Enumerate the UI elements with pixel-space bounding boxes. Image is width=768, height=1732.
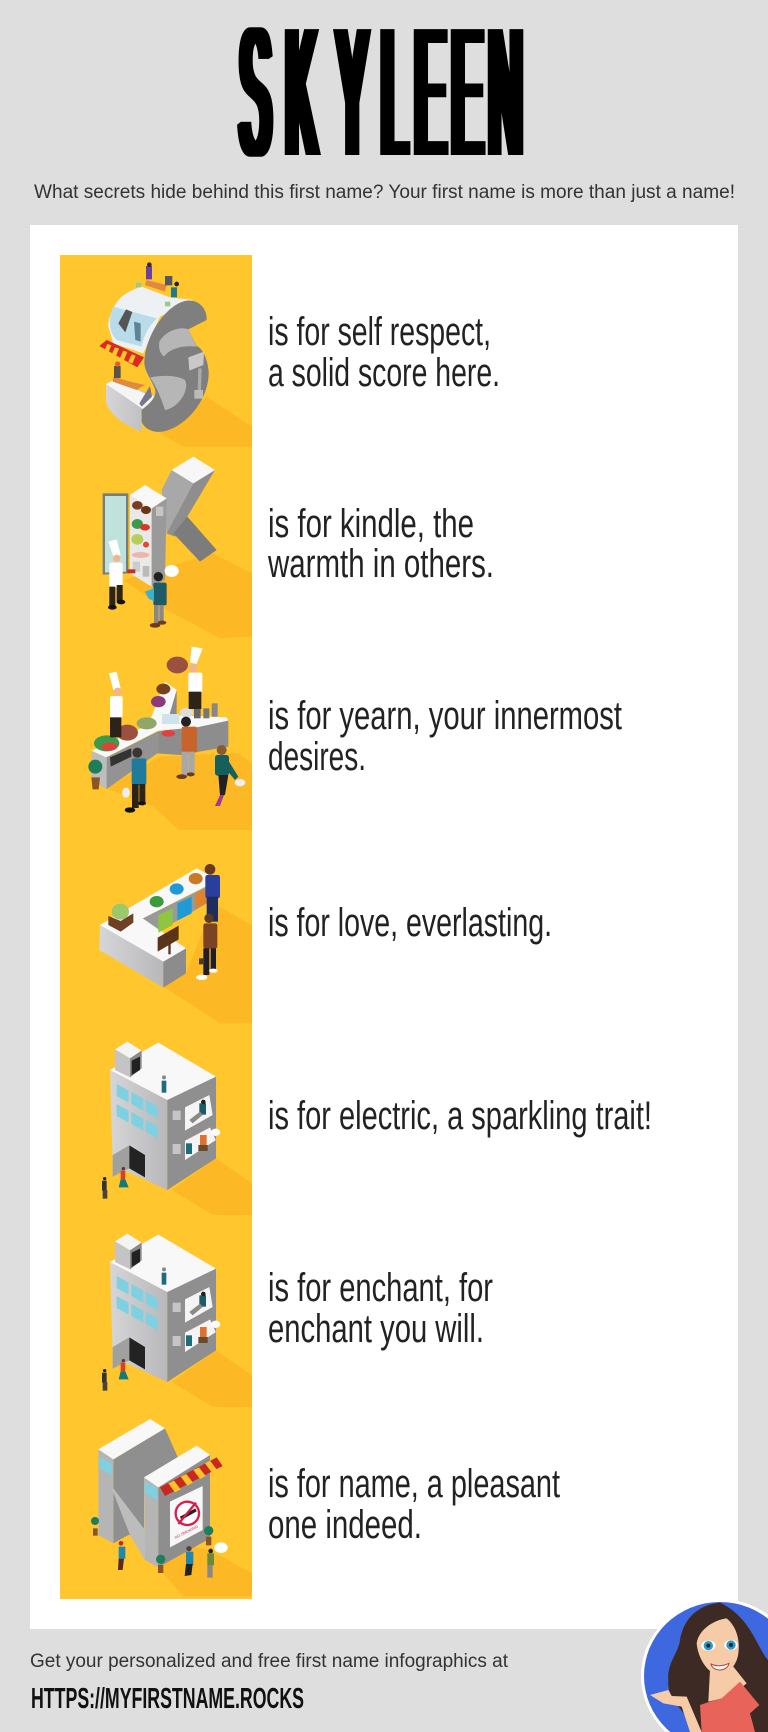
icon: letter N shop: NO SMOKING <box>174 1524 199 1540</box>
panel: white content card <box>30 225 738 1629</box>
icon: letter K fridge <box>103 457 252 638</box>
icon: letter E building one <box>102 1042 252 1215</box>
text: N row <box>268 1462 560 1547</box>
text: S row: is for self respect, <box>268 310 491 354</box>
text: N row: is for name, a pleasant <box>268 1462 560 1506</box>
icon: letter Y buffet <box>88 647 252 830</box>
icon: letter L recycling counter <box>99 864 252 1023</box>
text: K row <box>267 502 494 586</box>
text: Y row: desires. <box>268 735 366 779</box>
text: S row <box>268 310 500 395</box>
subtitle: What secrets hide behind this first name? Your first name is more than just a name! <box>34 182 735 203</box>
text: S row: a solid score here. <box>268 351 500 395</box>
icon: letter E building two <box>102 1234 252 1407</box>
text: E row two <box>268 1266 493 1351</box>
text: K row: warmth in others. <box>267 542 494 586</box>
text: Y row <box>268 694 622 779</box>
icon: letter N shop <box>91 1419 252 1597</box>
text: E row two: is for enchant, for <box>268 1266 493 1310</box>
text: N row: one indeed. <box>268 1503 422 1547</box>
icon: avatar woman <box>641 1599 768 1732</box>
text: E row two: enchant you will. <box>268 1307 484 1351</box>
panel: yellow illustration column <box>60 255 252 1599</box>
footer text: Get your personalized and free first name infographics at <box>30 1651 509 1672</box>
footer url: HTTPS://MYFIRSTNAME.ROCKS <box>31 1683 304 1715</box>
text: L row: is for love, everlasting. <box>268 901 552 945</box>
text: K row: is for kindle, the <box>268 502 474 546</box>
text: Y row: is for yearn, your innermost <box>268 694 622 738</box>
icon: letter S office <box>99 262 252 447</box>
